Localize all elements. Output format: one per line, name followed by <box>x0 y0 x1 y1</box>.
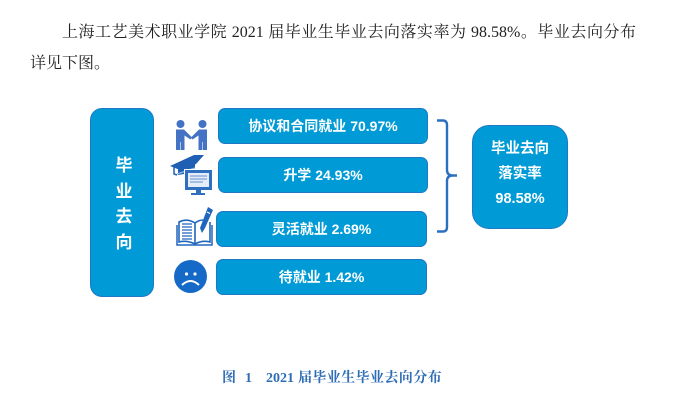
icon: graduation cap with monitor <box>170 155 212 195</box>
panel: left label 毕业去向: 业 <box>116 182 132 200</box>
figure caption: 1 <box>245 371 252 386</box>
box: flexible employment: 灵活就业 2.69% <box>272 221 371 237</box>
panel: placement rate summary: 98.58% <box>495 190 545 206</box>
panel: placement rate summary: 毕业去向 <box>491 140 549 156</box>
intro paragraph: 详见下图。 <box>30 55 110 72</box>
figure caption: 2021 <box>266 371 294 386</box>
icon: sad face <box>174 260 207 293</box>
icon: handshake <box>176 120 207 150</box>
box: awaiting employment: 待就业 1.42% <box>279 269 364 285</box>
panel: left label 毕业去向: 毕 <box>116 156 132 175</box>
figure caption: 图 <box>222 371 236 386</box>
brace connector <box>437 119 457 233</box>
box: agreement and contract employment <box>218 108 428 144</box>
box: agreement and contract employment: 协议和合同就业 70.97% <box>248 118 398 134</box>
box: further study: 升学 24.93% <box>283 167 363 183</box>
panel: left label 毕业去向: 向 <box>116 232 132 252</box>
box: awaiting employment <box>216 259 427 295</box>
panel: left label 毕业去向 <box>90 108 154 297</box>
panel: left label 毕业去向: 去 <box>116 207 132 226</box>
intro paragraph: 上海工艺美术职业学院 2021 届毕业生毕业去向落实率为 98.58%。毕业去向分布 <box>62 24 636 40</box>
box: flexible employment <box>216 211 427 247</box>
intro paragraph <box>30 23 636 72</box>
figure caption <box>222 370 442 386</box>
panel: placement rate summary <box>472 125 568 229</box>
figure caption: 届毕业生毕业去向分布 <box>298 371 442 386</box>
panel: placement rate summary: 落实率 <box>498 166 542 182</box>
icon: open book with pencil <box>176 207 213 246</box>
box: further study <box>218 157 428 193</box>
